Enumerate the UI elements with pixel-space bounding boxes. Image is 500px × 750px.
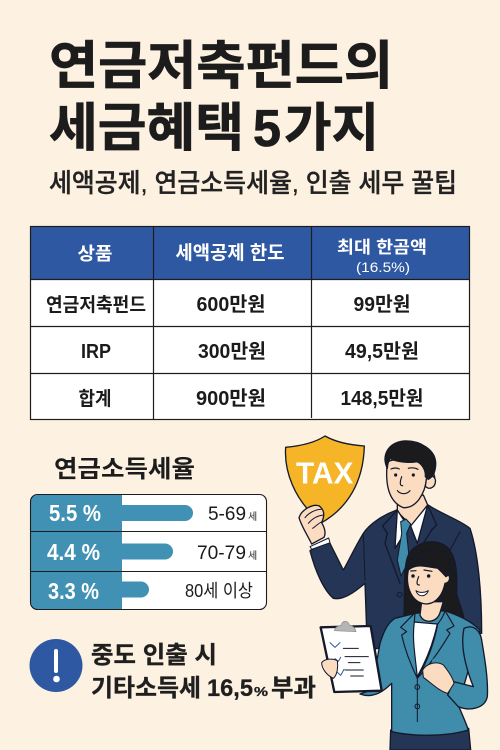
callout: early withdrawal warning [30, 639, 316, 702]
bar: 4.4% age 70-79: 세 [248, 550, 257, 562]
man's ear [425, 476, 436, 488]
row: 합계 [78, 387, 424, 410]
woman's sleeve [448, 627, 488, 709]
bar: 3.3% age 80+ [48, 578, 253, 604]
illustration: business people with tax shield [285, 436, 488, 750]
bar: 5.5% age 5-69: 5-69 [208, 504, 246, 525]
callout text: 기타소득세 [91, 675, 201, 702]
man's tie [397, 519, 411, 576]
woman's neck [420, 602, 443, 621]
woman's right hand [423, 663, 454, 693]
callout text: % [254, 684, 269, 699]
row: 합계: 900만원 [196, 387, 266, 410]
subtitle: 세액공제, 연금소득세율, 인출 세무 꿀팁 [49, 168, 457, 198]
title [49, 38, 393, 158]
woman's hair [404, 542, 464, 620]
bar: 3.3% age 80+: 80세 이상 [185, 581, 253, 601]
icon: exclamation mark [30, 639, 82, 692]
icon: TAX shield: TAX [296, 457, 354, 491]
row: IRP: 49,5만원 [345, 340, 419, 363]
chart: pension income tax rates by age [30, 494, 267, 610]
title: 5 [253, 100, 281, 158]
bar: 5.5% age 5-69 [49, 500, 257, 526]
table body [30, 280, 470, 420]
row: 연금저축펀드: 연금저축펀드 [46, 294, 146, 316]
callout text: 16,5 [207, 675, 253, 702]
row: 합계: 148,5만원 [340, 387, 424, 410]
row: 연금저축펀드: 99만원 [354, 293, 410, 316]
woman in teal blazer [321, 542, 488, 750]
woman's top [413, 622, 437, 677]
man's hand [299, 505, 325, 544]
table header: (16.5%) [356, 259, 410, 275]
woman's trousers [390, 728, 471, 750]
woman's left hand [322, 659, 338, 678]
heading: pension income tax rate: 연금소득세율 [54, 456, 195, 483]
row: 합계: 합계 [78, 388, 112, 410]
table header: 최대 한곰액 [337, 238, 427, 257]
title: 세금혜택 [49, 100, 244, 158]
row: 연금저축펀드: 600만원 [196, 293, 266, 316]
bar: 4.4% age 70-79: 4.4 % [47, 539, 100, 565]
bar: 5.5% age 5-69: 세 [248, 511, 257, 523]
man's hair [385, 441, 436, 479]
table: tax credit limits [30, 226, 470, 420]
bar: 4.4% age 70-79: 70-79 [197, 543, 246, 564]
woman's face [407, 566, 450, 604]
title: 연금저축펀드의 [49, 38, 393, 96]
icon: TAX shield [285, 436, 364, 523]
woman's fringe [405, 549, 450, 577]
row: IRP: 300만원 [198, 340, 266, 363]
woman's facial features [411, 570, 432, 596]
icon: clipboard with checklist [321, 621, 382, 692]
man's facial features [391, 468, 418, 494]
pen [433, 649, 447, 661]
row: IRP: IRP [81, 341, 111, 363]
callout text [91, 642, 316, 702]
table header: 세액공제 한도 [176, 242, 284, 264]
table header: 상품 [78, 244, 112, 264]
bar: 3.3% age 80+: 3.3 % [48, 578, 99, 604]
man's face [387, 459, 435, 508]
man's neck [397, 495, 428, 526]
woman's lapels [401, 611, 454, 678]
row: IRP [81, 340, 419, 363]
callout text: 중도 인출 시 [91, 642, 217, 669]
woman's blazer body [360, 611, 480, 735]
bar: 5.5% age 5-69: 5.5 % [49, 500, 101, 526]
man's lapels [383, 505, 437, 583]
man's shirt collar [395, 505, 428, 548]
table header [30, 226, 470, 280]
bar: 4.4% age 70-79 [47, 539, 257, 565]
row: 연금저축펀드 [46, 293, 410, 316]
man in navy suit [299, 441, 482, 650]
title: 가지 [284, 100, 379, 158]
man's jacket and arm [310, 505, 482, 650]
man's cuff [310, 538, 330, 549]
callout text: 부과 [271, 675, 316, 702]
